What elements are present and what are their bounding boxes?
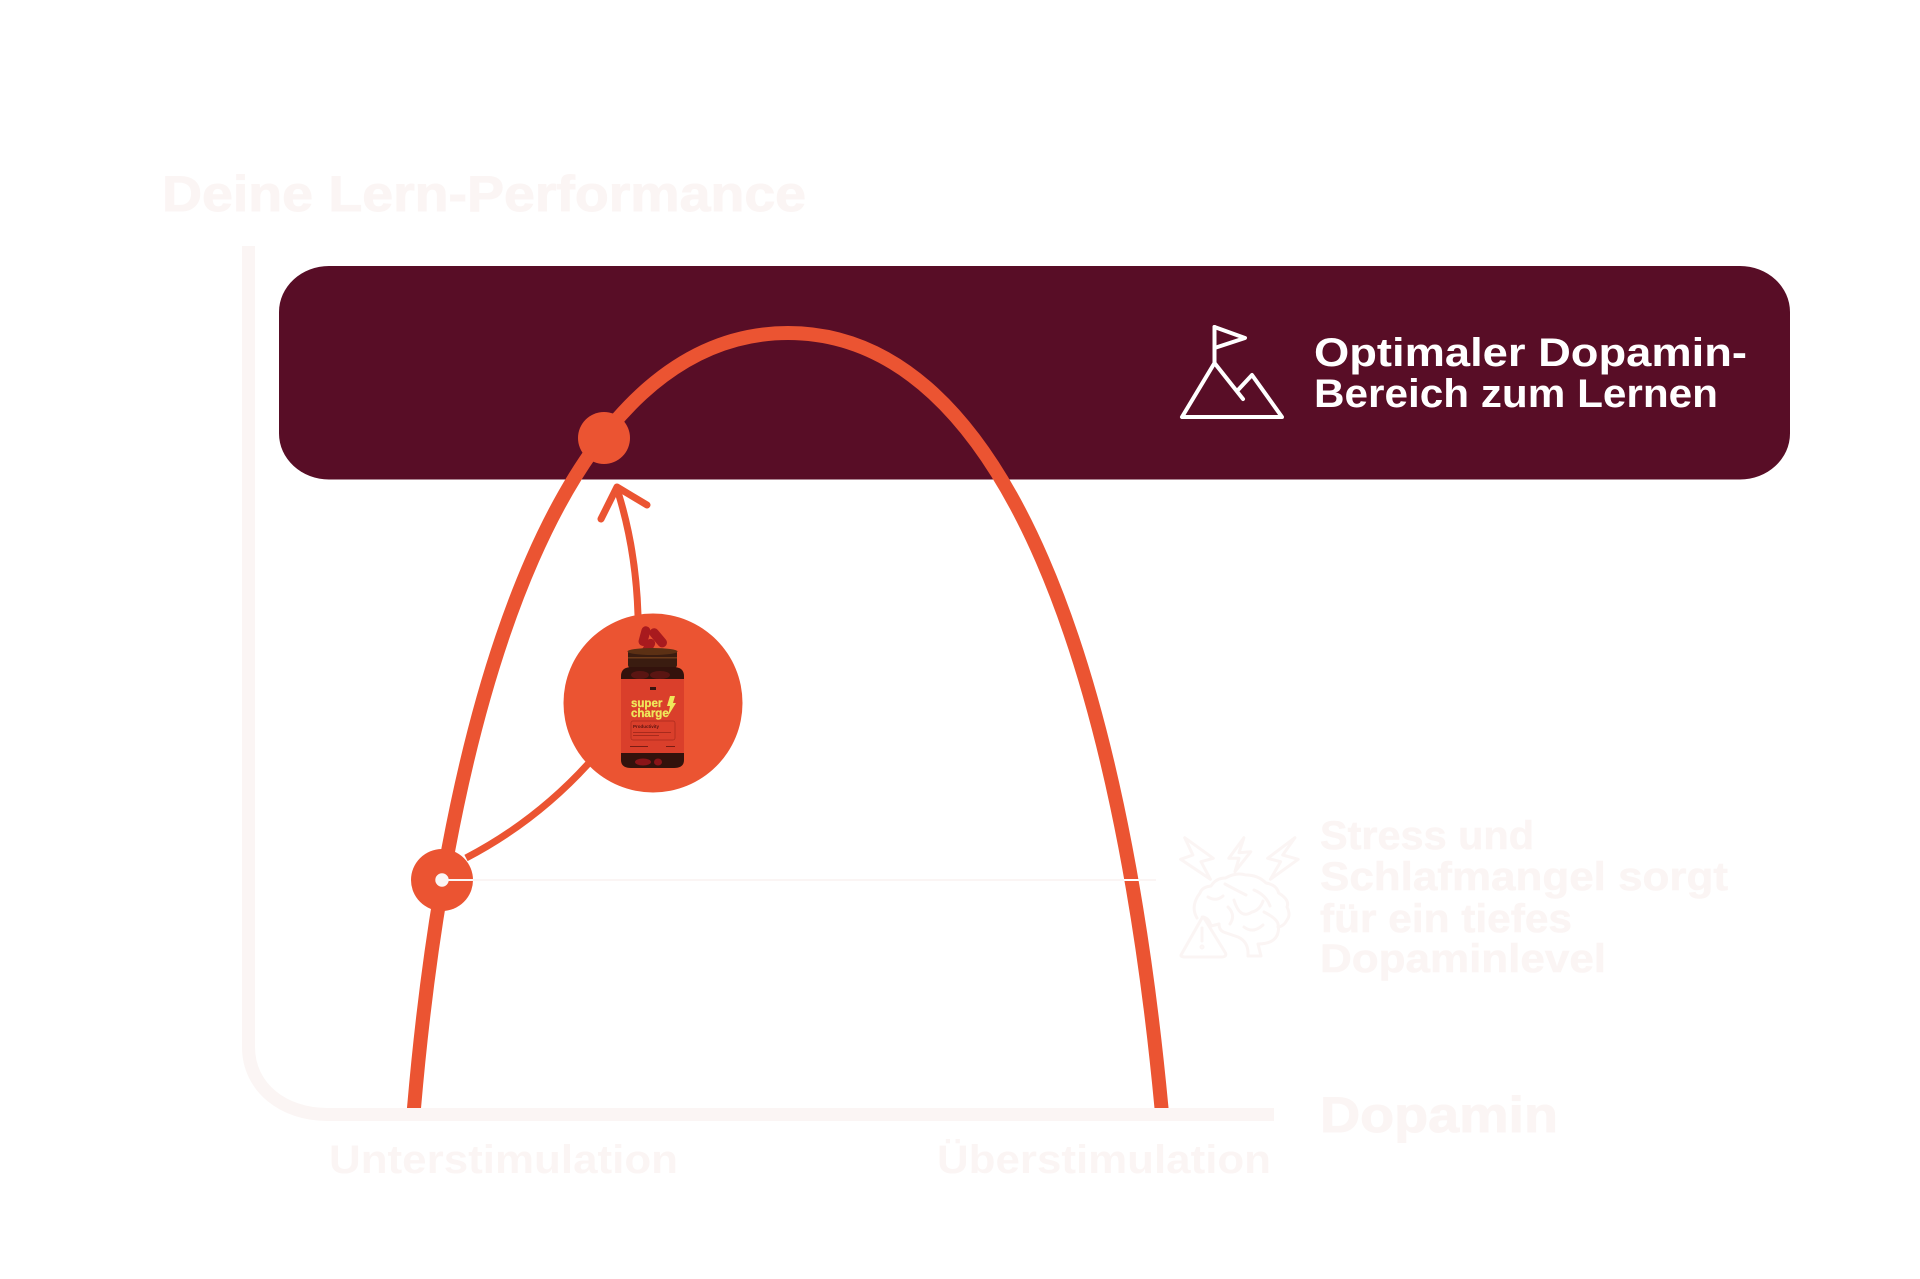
icon: capsules [638,625,669,657]
x axis label: dopamine: Dopamin [1320,1087,1558,1143]
panel heading [1314,331,1747,416]
panel heading: Bereich zum Lernen [1314,372,1718,416]
text block: stress and sleep deprivation: für ein tiefes [1320,897,1572,941]
title: y axis label: Deine Lern-Performance [162,166,806,222]
marker: low dopamine point [411,849,473,911]
icon: supplement bottle [621,648,684,768]
panel heading: Optimaler Dopamin- [1314,331,1747,375]
low dopamine level line [473,879,1156,881]
icon: mountain with flag [1182,327,1282,417]
x axis label: overstimulation: Überstimulation [937,1137,1271,1182]
icon: supplement bottle: charge [631,708,669,720]
supplement circle with bottle [564,614,742,792]
chart axes [248,246,1274,1114]
product box on label [631,721,675,740]
infographic: dopamine learning performance curve [166,174,1790,1174]
bottle label text: super [631,698,663,710]
dopamine curve [414,333,1162,1113]
text block: stress and sleep deprivation: Stress und [1320,814,1534,858]
marker: raised dopamine point [578,412,630,464]
text block: stress and sleep deprivation [1320,814,1728,981]
text block: stress and sleep deprivation: Schlafmangel sorgt [1320,855,1728,899]
text block: stress and sleep deprivation: Dopaminlevel [1320,937,1606,981]
icon: stressed brain with lightning and warning [1181,838,1298,957]
connector: low point to supplement [466,764,588,858]
arrow: supplement to optimal range [601,487,647,615]
x axis label: understimulation: Unterstimulation [329,1138,678,1182]
panel: optimal dopamine range [279,266,1790,480]
icon: supplement bottle: Productivity [633,724,660,729]
icon: lightning bolt on label [667,696,676,716]
